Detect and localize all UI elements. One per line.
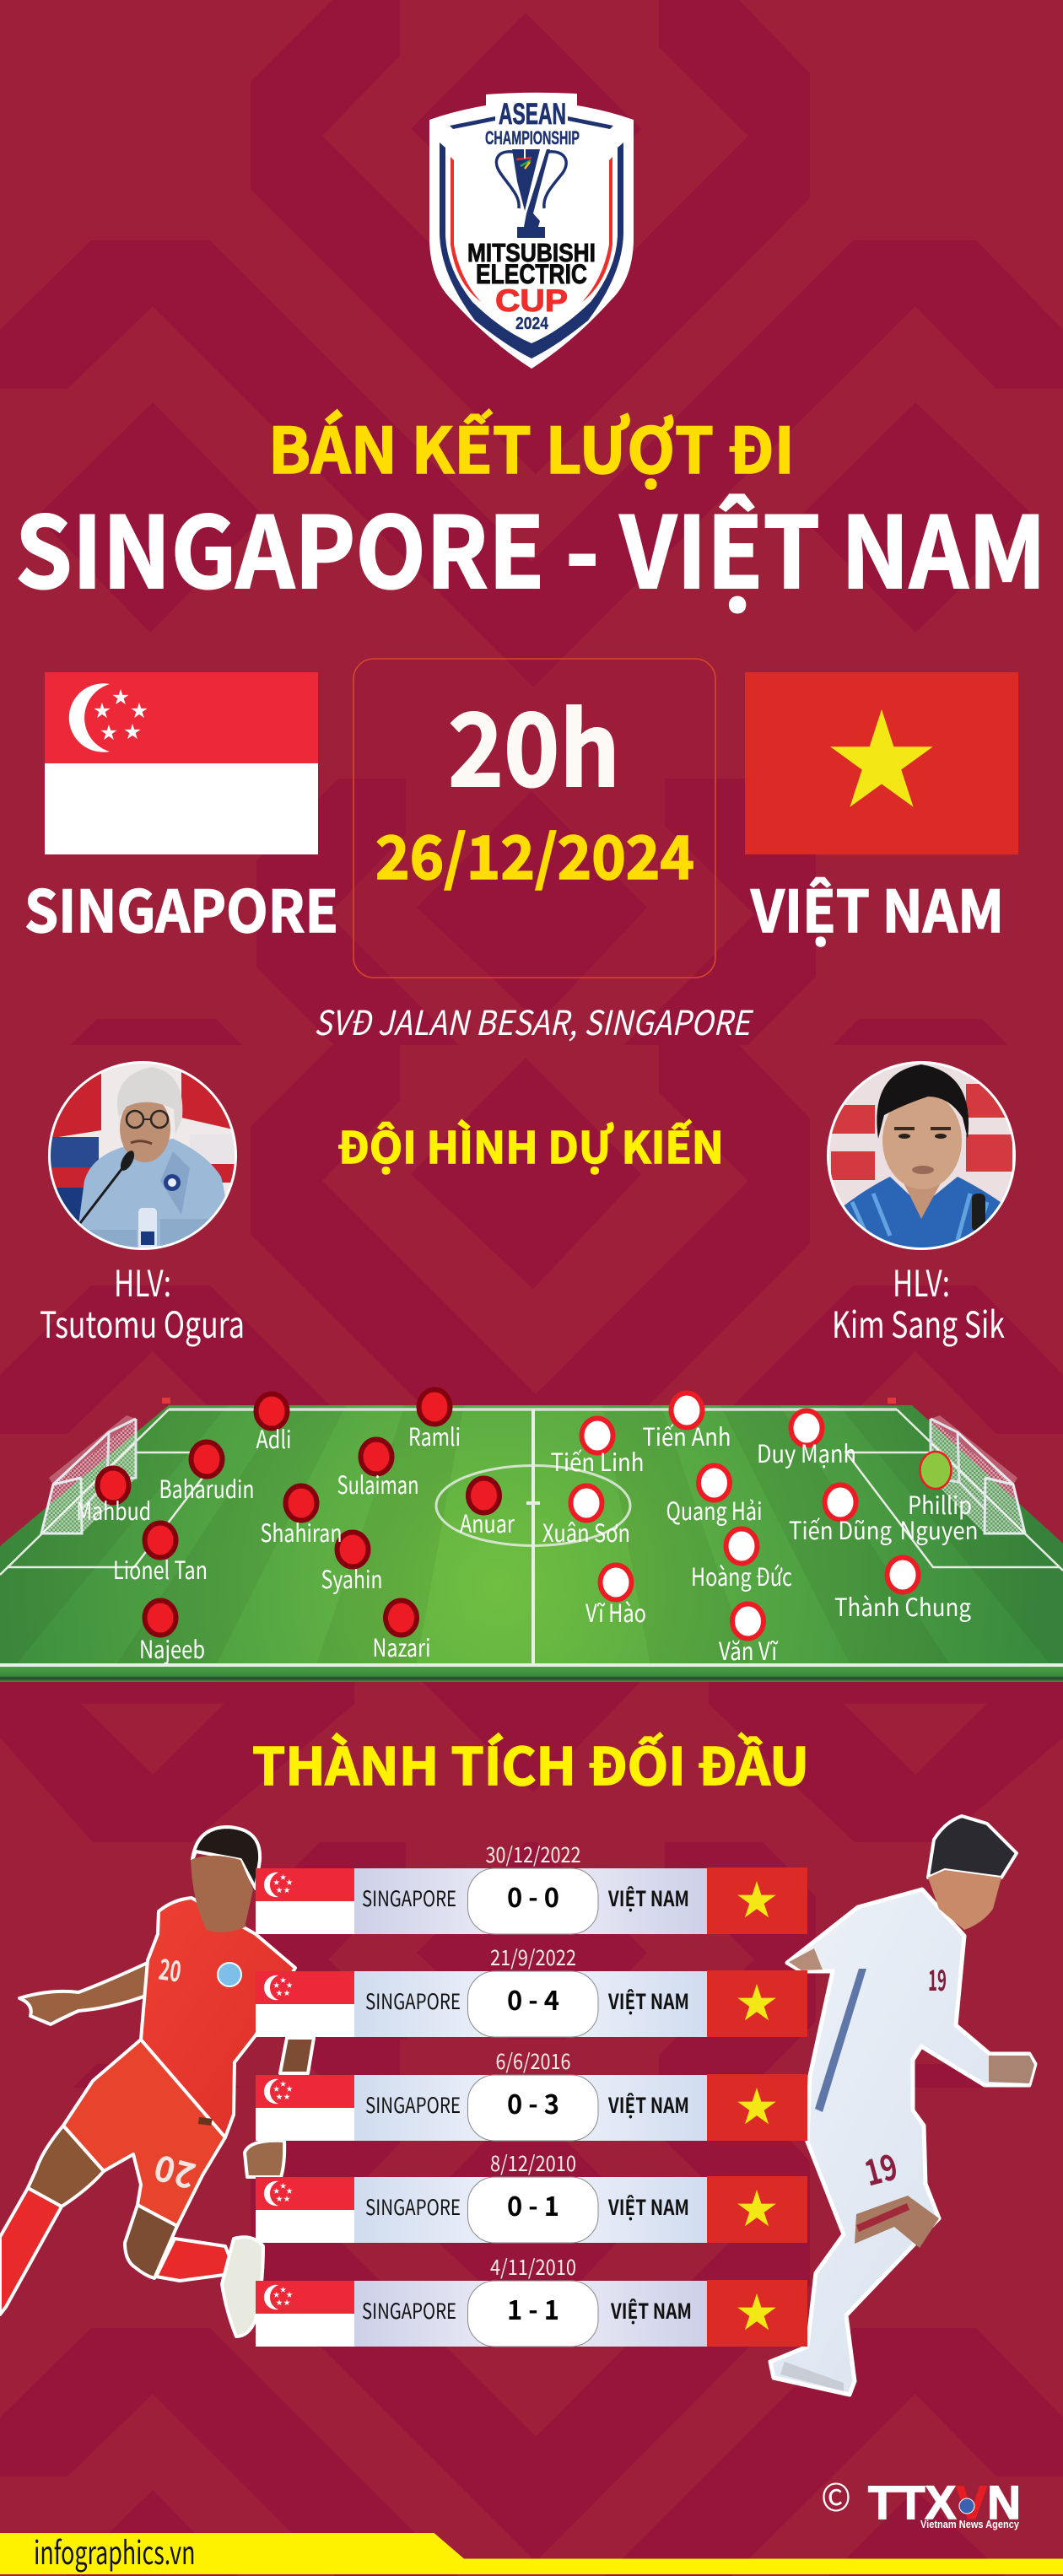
- coach label: Vietnam: [832, 1255, 1005, 1349]
- lineup: Vietnam: [570, 1393, 952, 1638]
- player names: Mahbud: [76, 1492, 151, 1528]
- coach label: Singapore: [40, 1255, 245, 1349]
- player: Anuar: [468, 1478, 499, 1513]
- row: 4/11/2010: VIỆT NAM: [610, 2295, 692, 2325]
- heading: round: BÁN KẾT LƯỢT ĐI: [268, 400, 795, 492]
- logo: ASEAN Championship Mitsubishi Electric Cup 2024: 2024: [515, 315, 549, 333]
- copyright symbol: ©: [821, 2467, 851, 2523]
- row: 6/6/2016: VIỆT NAM: [607, 2089, 689, 2120]
- player: Tiến Dũng: [825, 1485, 855, 1520]
- row: 21/9/2022: SINGAPORE: [365, 1986, 461, 2016]
- score: 0 - 0: [507, 1877, 559, 1916]
- row: 8/12/2010: [256, 2148, 807, 2243]
- date: 8/12/2010: [490, 2148, 576, 2178]
- player names: Shahiran: [260, 1514, 343, 1549]
- player names: Adli: [256, 1420, 292, 1456]
- player names: Lionel Tan: [113, 1551, 208, 1587]
- figure: Singapore player: [0, 1827, 314, 2336]
- player names: Xuân Sơn: [542, 1514, 630, 1549]
- score: 0 - 1: [507, 2185, 559, 2224]
- player: Tiến Linh: [582, 1419, 612, 1452]
- player: Vĩ Hào: [601, 1566, 631, 1599]
- player names: Tiến Linh: [550, 1443, 645, 1479]
- player: Thành Chung: [888, 1557, 918, 1592]
- player names: Nazari: [373, 1629, 430, 1664]
- shirt number: 20: [157, 1947, 184, 1991]
- player: Mahbud: [98, 1468, 128, 1503]
- player names: Văn Vĩ: [719, 1632, 779, 1668]
- player names: Hoàng Đức: [691, 1558, 792, 1593]
- shirt number: 19: [928, 1958, 947, 1999]
- player: Ramli: [418, 1390, 451, 1424]
- logo: ASEAN Championship Mitsubishi Electric Cup 2024: MITSUBISHI: [467, 238, 596, 267]
- player names: Phillip: [908, 1486, 972, 1522]
- player: Syahin: [337, 1532, 368, 1567]
- panel: time and date: [353, 659, 715, 978]
- logo: ASEAN Championship Mitsubishi Electric Cup 2024: CUP: [495, 283, 568, 318]
- lineup: Singapore: [98, 1390, 499, 1635]
- player names: Sulaiman: [337, 1466, 418, 1501]
- row: 6/6/2016: [256, 2045, 807, 2141]
- player names: Quang Hải: [666, 1492, 763, 1528]
- team name: Singapore: SINGAPORE: [24, 865, 338, 949]
- player: Sulaiman: [361, 1439, 391, 1474]
- kick-off time: 20h: [448, 669, 620, 816]
- player names: Duy Mạnh: [757, 1435, 856, 1470]
- row: 21/9/2022: [256, 1942, 807, 2037]
- player: Hoàng Đức: [726, 1528, 758, 1564]
- date: 6/6/2016: [496, 2045, 570, 2076]
- player: Baharudin: [191, 1442, 223, 1476]
- player names: Najeeb: [139, 1630, 205, 1666]
- row: 8/12/2010: SINGAPORE: [365, 2191, 461, 2222]
- player: Nazari: [386, 1601, 417, 1635]
- player: Adli: [256, 1393, 287, 1429]
- player: Quang Hải: [699, 1466, 730, 1500]
- football pitch: [0, 1398, 1063, 1682]
- player names: Tiến Anh: [643, 1418, 731, 1453]
- logo: ASEAN Championship Mitsubishi Electric Cup 2024: [429, 93, 634, 369]
- player: Najeeb: [145, 1601, 175, 1635]
- flag: Vietnam: [745, 672, 1018, 854]
- footer bar: [0, 2533, 1063, 2574]
- figure: Vietnam player: [770, 1816, 1035, 2395]
- player names: Anuar: [460, 1505, 515, 1540]
- logo shield: [429, 93, 634, 369]
- score: 1 - 1: [507, 2289, 559, 2328]
- row: 30/12/2022: SINGAPORE: [362, 1883, 456, 1913]
- match date: 26/12/2024: [375, 811, 694, 897]
- player names: Baharudin: [159, 1470, 255, 1506]
- row: 30/12/2022: [256, 1839, 807, 1934]
- row: 4/11/2010: [256, 2251, 807, 2347]
- lineup heading: ĐỘI HÌNH DỰ KIẾN: [337, 1113, 724, 1176]
- flag: Singapore: [45, 672, 318, 854]
- logo: TTXVN: Vietnam News Agency: [920, 2518, 1020, 2530]
- player names: Nguyen: [899, 1512, 979, 1547]
- row: 21/9/2022: VIỆT NAM: [607, 1986, 689, 2016]
- coach photo: Tsutomu Ogura: [48, 1061, 237, 1257]
- player names: Thành Chung: [834, 1588, 971, 1624]
- player: Lionel Tan: [145, 1523, 175, 1557]
- coach label: Singapore: HLV:: [114, 1255, 171, 1307]
- player: Xuân Sơn: [570, 1486, 602, 1520]
- row: 8/12/2010: VIỆT NAM: [607, 2191, 689, 2222]
- row: 30/12/2022: VIỆT NAM: [607, 1883, 689, 1913]
- player names: [76, 1418, 979, 1668]
- venue: SVĐ JALAN BESAR, SINGAPORE: [314, 996, 754, 1045]
- logo: TTXVN: TTXVN: [868, 2476, 1021, 2529]
- player: Văn Vĩ: [732, 1604, 764, 1638]
- coach photo: Kim Sang Sik: [827, 1061, 1016, 1257]
- coach label: Singapore: Tsutomu Ogura: [40, 1296, 245, 1349]
- date: 21/9/2022: [490, 1942, 576, 1972]
- head-to-head heading: THÀNH TÍCH ĐỐI ĐẦU: [252, 1725, 809, 1800]
- player names: Tiến Dũng: [789, 1512, 892, 1547]
- team name: Vietnam: VIỆT NAM: [750, 865, 1004, 949]
- score: 0 - 3: [507, 2083, 559, 2122]
- logo: ASEAN Championship Mitsubishi Electric Cup 2024: CHAMPIONSHIP: [485, 127, 580, 148]
- footer source: infographics.vn: [34, 2527, 196, 2573]
- shorts number: 20: [148, 2143, 200, 2204]
- player names: Vĩ Hào: [585, 1594, 646, 1630]
- shorts number: 19: [858, 2139, 903, 2196]
- score: 0 - 4: [507, 1980, 559, 2018]
- logo text: ASEAN: [499, 98, 566, 131]
- date: 30/12/2022: [486, 1839, 580, 1869]
- trophy: [496, 148, 566, 238]
- player: Shahiran: [285, 1486, 317, 1520]
- logo: ASEAN Championship Mitsubishi Electric Cup 2024: ELECTRIC: [476, 259, 587, 289]
- player names: Syahin: [321, 1560, 383, 1596]
- row: 4/11/2010: SINGAPORE: [362, 2295, 456, 2325]
- player: Tiến Anh: [672, 1393, 702, 1427]
- goalkeeper: Phillip Nguyen: [920, 1452, 952, 1489]
- player names: Ramli: [408, 1418, 461, 1453]
- row: 6/6/2016: SINGAPORE: [365, 2089, 461, 2120]
- date: 4/11/2010: [490, 2251, 576, 2282]
- player: Duy Mạnh: [791, 1410, 822, 1446]
- coach label: Vietnam: Kim Sang Sik: [832, 1296, 1005, 1349]
- coach label: Vietnam: HLV:: [893, 1255, 950, 1307]
